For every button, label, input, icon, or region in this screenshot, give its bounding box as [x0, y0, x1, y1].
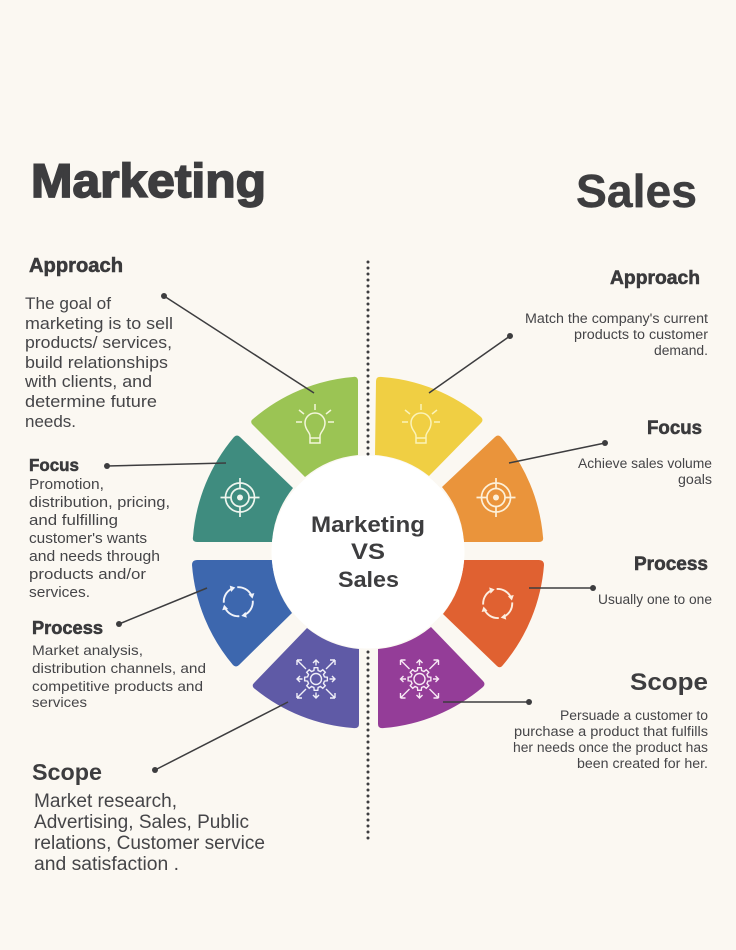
heading: sales scope: Scope — [630, 669, 708, 696]
text: sales focus body — [578, 456, 712, 487]
icon: cycle red — [477, 583, 518, 624]
connector: sales focus — [509, 440, 608, 463]
text: marketing approach body — [24, 294, 173, 431]
text: marketing process body: competitive products and — [32, 678, 203, 694]
segment: sales scope purple — [378, 627, 484, 728]
text: marketing focus body: customer's wants — [29, 530, 147, 547]
text: marketing focus body: and needs through — [29, 548, 160, 565]
heading: marketing scope: Scope — [32, 759, 102, 785]
text: sales approach body: products to customer — [574, 327, 709, 342]
text: sales process body: Usually one to one — [598, 592, 712, 607]
panel: sales process — [598, 554, 712, 607]
center label: Sales — [338, 567, 399, 592]
panel: marketing focus — [29, 455, 170, 601]
heading: sales focus: Focus — [647, 418, 702, 439]
title: Marketing: Marketing — [31, 155, 266, 208]
text: marketing focus body: products and/or — [29, 566, 146, 583]
text: marketing scope body: and satisfaction . — [34, 854, 179, 875]
icon: gear arrows purple — [400, 660, 438, 698]
text: marketing approach body: with clients, and — [24, 372, 152, 391]
connector: marketing approach — [161, 293, 314, 393]
heading: sales approach: Approach — [610, 268, 700, 289]
center label: Marketing — [311, 512, 425, 537]
heading: sales process: Process — [634, 554, 708, 575]
icon: target orange — [476, 478, 516, 517]
text: marketing focus body: Promotion, — [29, 476, 104, 493]
text: marketing approach body: needs. — [25, 412, 76, 431]
text: sales approach body: Match the company's current — [525, 311, 708, 326]
text: marketing approach body: products/ services, — [25, 333, 172, 352]
text: marketing scope body: Advertising, Sales, Public — [34, 812, 249, 833]
text: sales scope body — [513, 708, 708, 771]
segment: marketing process blue — [192, 560, 292, 666]
panel: sales approach — [525, 268, 709, 358]
panel: marketing process — [32, 618, 206, 710]
center label — [311, 512, 425, 592]
icon: gear arrows indigo — [297, 660, 335, 698]
connector: sales process — [529, 585, 596, 591]
text: marketing approach body: The goal of — [25, 294, 111, 313]
text: sales approach body — [525, 311, 709, 358]
text: marketing process body — [32, 642, 206, 710]
connector: marketing process — [116, 588, 207, 627]
text: marketing process body: services — [32, 694, 87, 710]
text: marketing approach body: build relationships — [25, 353, 168, 372]
panel: sales focus — [578, 418, 712, 487]
segment: marketing approach green — [251, 377, 358, 477]
text: marketing approach body: determine future — [25, 392, 157, 411]
panel: sales scope — [513, 669, 708, 771]
segment: marketing scope indigo — [253, 628, 359, 728]
text: marketing process body: Market analysis, — [32, 642, 143, 658]
text: marketing scope body: Market research, — [34, 791, 177, 812]
wheel diagram — [192, 377, 544, 728]
text: sales scope body: Persuade a customer to — [560, 708, 708, 723]
center circle — [272, 456, 464, 648]
text: sales focus body: goals — [678, 472, 712, 487]
heading: marketing focus: Focus — [29, 455, 79, 475]
icon: cycle blue — [218, 581, 259, 622]
segment: sales approach yellow — [375, 377, 482, 476]
connector: sales approach — [429, 333, 513, 393]
text: marketing process body: distribution channels, and — [32, 660, 206, 676]
dotted center divider — [366, 262, 370, 840]
panel: marketing scope — [32, 759, 265, 875]
text: sales scope body: been created for her. — [577, 756, 708, 771]
heading: marketing process: Process — [32, 618, 103, 638]
text: marketing focus body: and fulfilling — [29, 512, 118, 529]
text: marketing focus body: services. — [29, 584, 90, 601]
connector: marketing focus — [104, 463, 226, 469]
icon: target teal — [220, 478, 260, 517]
title: Sales: Sales — [576, 165, 697, 217]
icon: bulb yellow — [402, 404, 440, 443]
text: marketing scope body: relations, Customer service — [34, 833, 265, 854]
text: marketing focus body — [29, 476, 170, 601]
segment: sales process red — [443, 560, 544, 667]
segment: sales focus orange — [442, 436, 543, 542]
panel: marketing approach — [24, 255, 173, 431]
icon: bulb green — [296, 404, 334, 443]
heading: marketing approach: Approach — [29, 255, 123, 277]
text: sales scope body: her needs once the product has — [513, 740, 708, 755]
connector: sales scope — [443, 699, 532, 705]
text: marketing scope body — [34, 791, 265, 875]
text: sales scope body: purchase a product that fulfills — [514, 724, 708, 739]
center label: VS — [351, 539, 385, 564]
connector: marketing scope — [152, 702, 288, 773]
text: marketing focus body: distribution, pricing, — [29, 494, 170, 511]
text: sales approach body: demand. — [654, 343, 708, 358]
text: marketing approach body: marketing is to sell — [25, 314, 173, 333]
segment: marketing focus teal — [193, 436, 293, 542]
text: sales focus body: Achieve sales volume — [578, 456, 712, 471]
